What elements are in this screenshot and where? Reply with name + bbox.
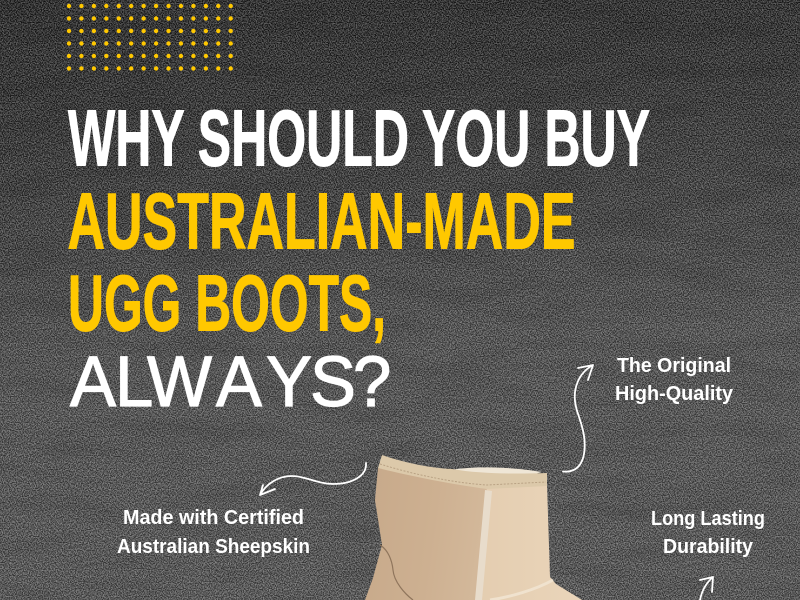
label: long lasting durability: Durability xyxy=(663,536,754,558)
boot left panel xyxy=(365,468,488,600)
boot ankle crease xyxy=(380,545,413,600)
label: long lasting durability xyxy=(651,508,765,558)
title line: ugg boots: UGG BOOTS, xyxy=(68,258,386,348)
label: made with certified australian sheepskin xyxy=(117,507,310,558)
boot sole welt xyxy=(490,580,553,600)
label: made with certified australian sheepskin: Australian Sheepskin xyxy=(117,536,310,558)
arrow: to made with certified xyxy=(260,463,366,495)
boot seam xyxy=(475,490,492,600)
arrow: to long lasting durability xyxy=(700,577,713,600)
boot collar xyxy=(378,455,547,489)
icon: ugg boot xyxy=(365,455,582,600)
label: made with certified australian sheepskin: Made with Certified xyxy=(123,507,304,529)
boot collar stitching xyxy=(380,464,546,485)
label: the original high-quality: The Original xyxy=(617,355,731,377)
boot right panel xyxy=(477,484,582,600)
arrow: to the original high-quality xyxy=(563,365,593,472)
title line: always: ALWAYS? xyxy=(70,342,391,421)
boot fur lining xyxy=(450,467,541,480)
callout labels xyxy=(117,355,765,558)
decorative yellow dot grid xyxy=(69,6,232,68)
label: the original high-quality xyxy=(615,355,734,405)
label: long lasting durability: Long Lasting xyxy=(651,508,765,530)
label: the original high-quality: High-Quality xyxy=(615,383,734,405)
title xyxy=(68,94,650,421)
